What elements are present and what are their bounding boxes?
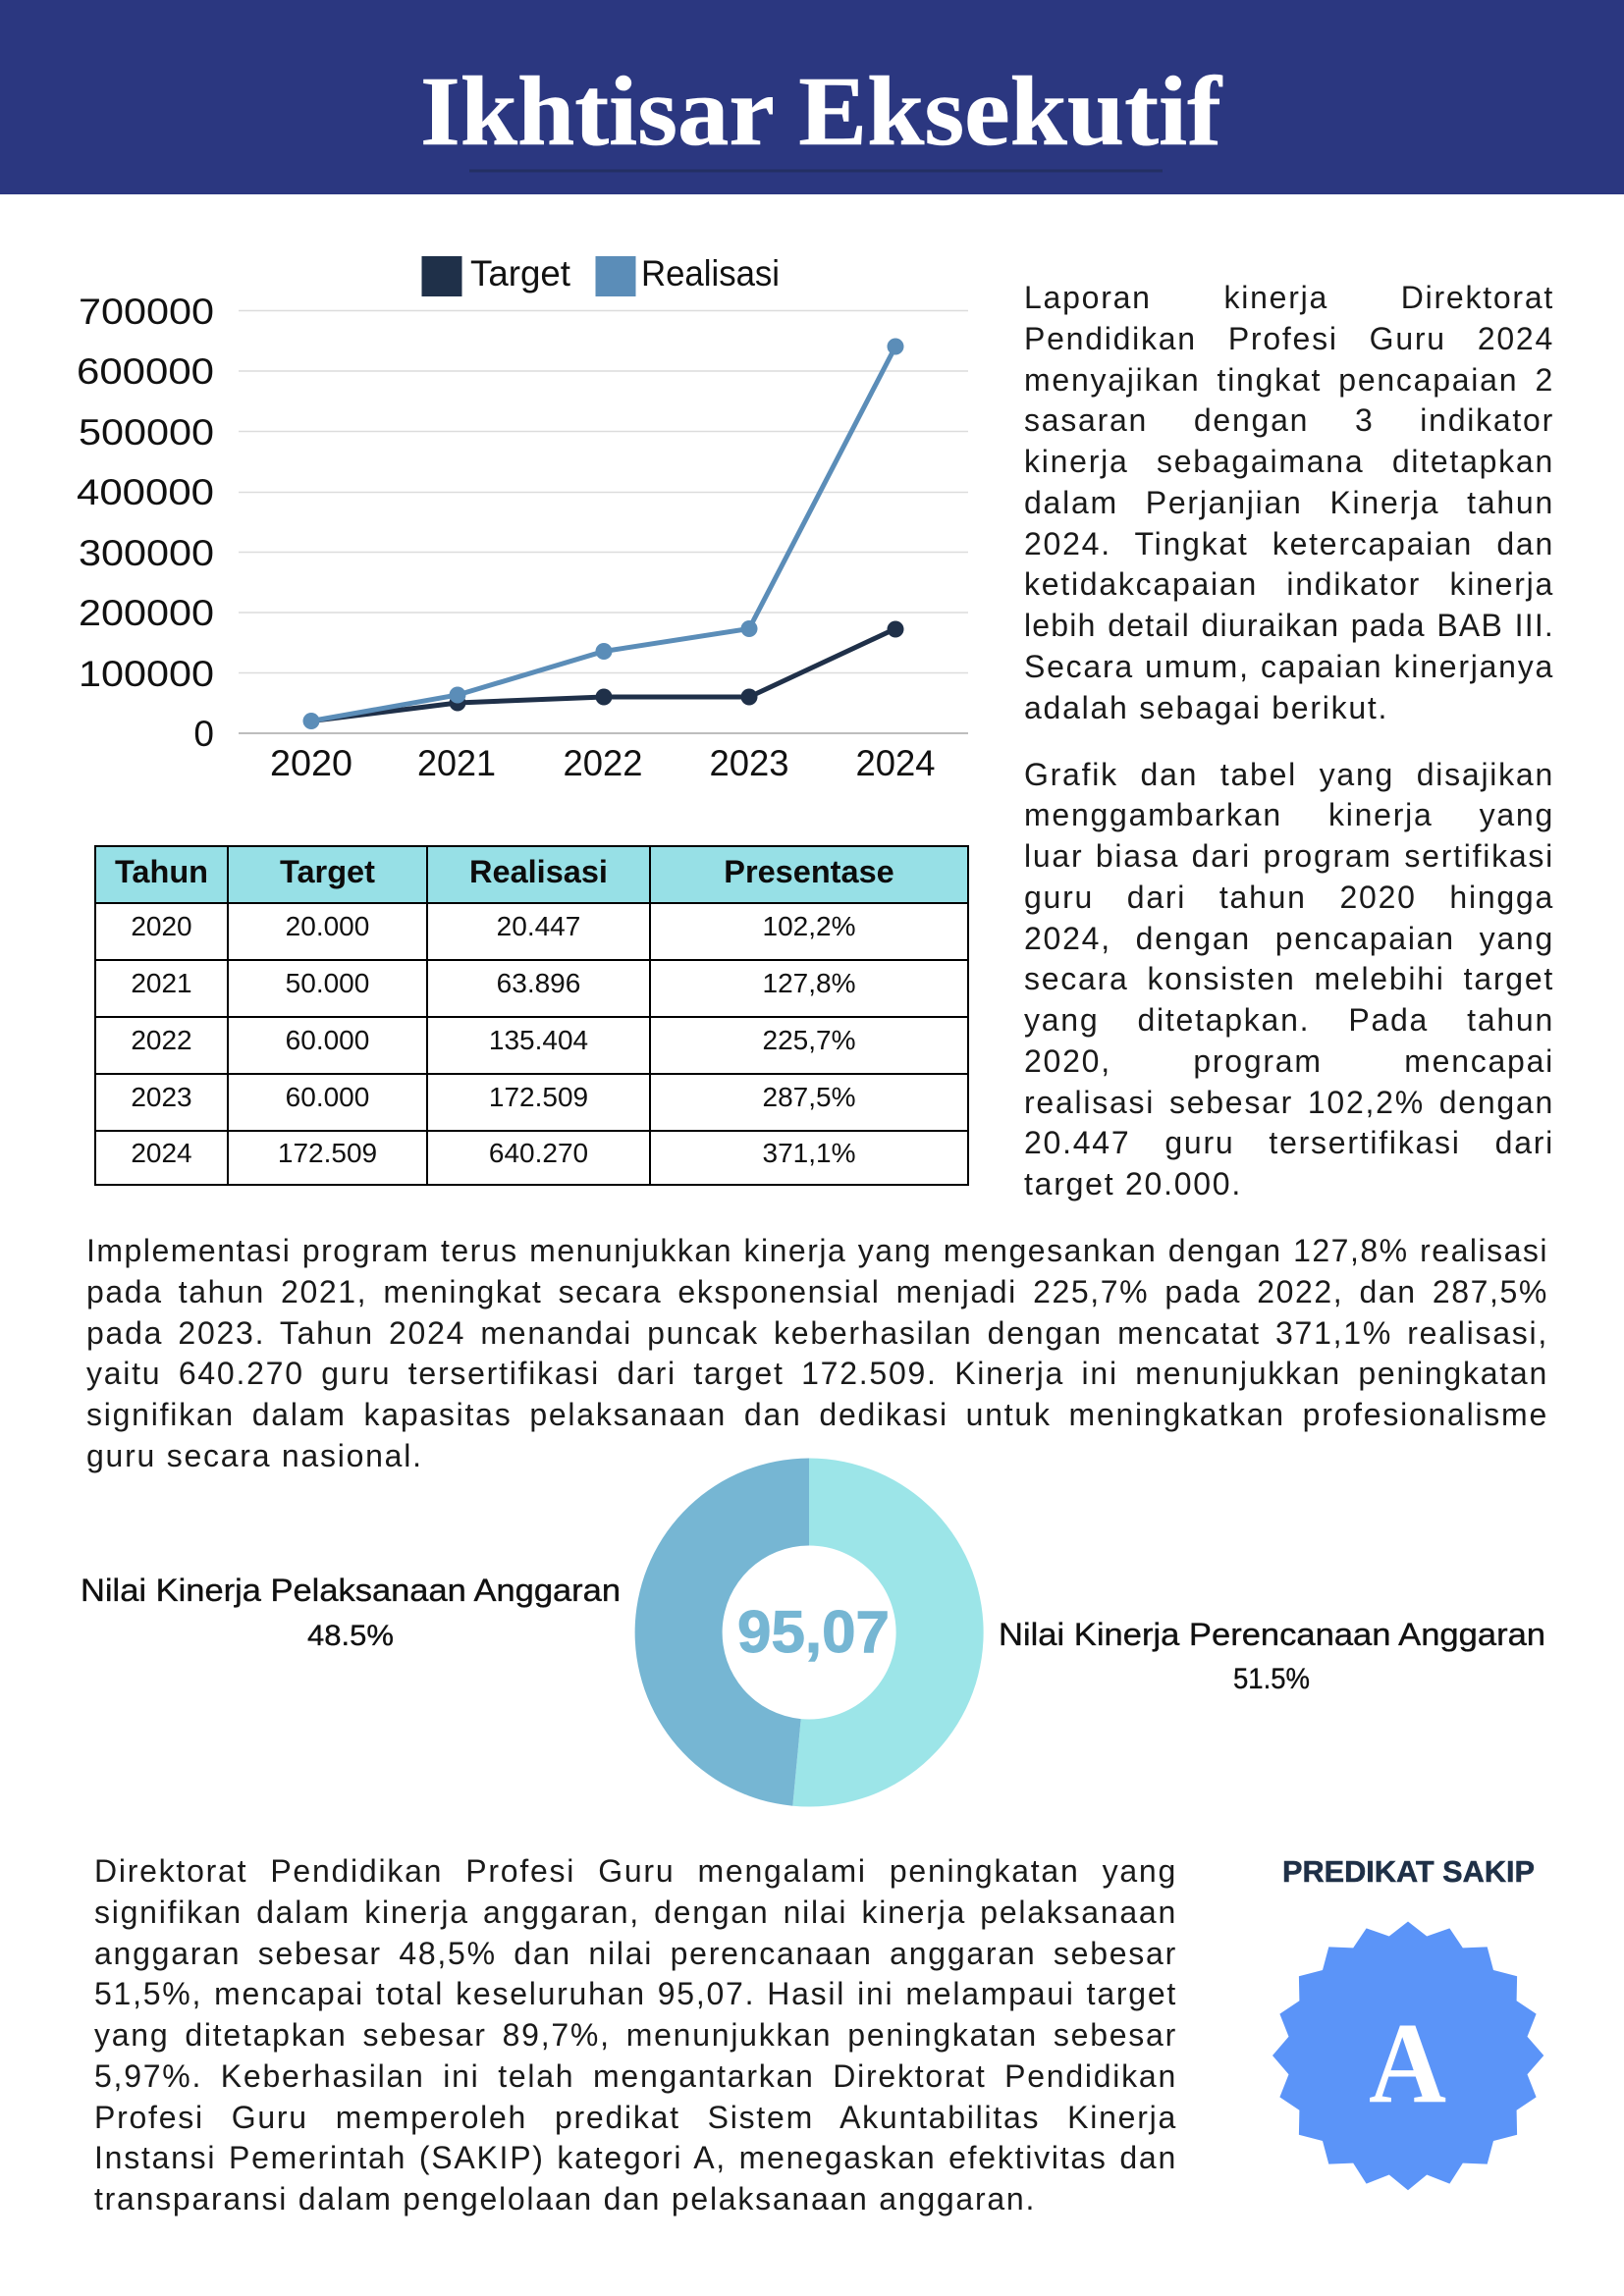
y-axis labels: 600000 <box>77 351 214 392</box>
y-axis labels: 300000 <box>79 533 214 573</box>
paragraph: implementasi program: guru secara nasional. <box>86 1438 423 1473</box>
header banner <box>0 0 1624 194</box>
data table: 60.000 <box>286 1025 369 1055</box>
y-axis labels <box>77 292 214 754</box>
series: Target <box>311 620 903 721</box>
data table: 102,2% <box>763 911 855 941</box>
paragraph: grafik dan tabel: menggambarkan kinerja yang <box>1024 797 1554 832</box>
label: perencanaan anggaran: 51.5% <box>1233 1663 1310 1695</box>
data table: 2021 <box>131 968 192 998</box>
paragraph: laporan kinerja: lebih detail diuraikan pada BAB III. <box>1024 608 1554 643</box>
y-axis labels: 0 <box>193 714 214 754</box>
paragraph: kinerja anggaran <box>94 1853 1177 2216</box>
donut centre value: 95,07 <box>737 1599 890 1665</box>
paragraph: kinerja anggaran: Instansi Pemerintah (SAKIP) kategori A, menegaskan efektivitas dan <box>94 2140 1177 2175</box>
label: pelaksanaan anggaran <box>81 1573 621 1652</box>
paragraph: grafik dan tabel: realisasi sebesar 102,2% dengan <box>1024 1084 1554 1119</box>
paragraph: implementasi program: yaitu 640.270 guru tersertifikasi dari target 172.509. Kinerja ini menunjukkan peningkatan <box>86 1356 1548 1391</box>
data table: Target <box>280 854 375 889</box>
paragraph: laporan kinerja: 2024. Tingkat ketercapaian dan <box>1024 526 1554 561</box>
segment: perencanaan 51.5% <box>792 1458 984 1806</box>
paragraph: implementasi program: Implementasi program terus menunjukkan kinerja yang mengesankan dengan 127,8% realisasi <box>86 1233 1548 1268</box>
paragraph: laporan kinerja: dalam Perjanjian Kinerja tahun <box>1024 485 1554 520</box>
badge grade letter: A <box>1369 1999 1446 2127</box>
x-axis labels: 2024 <box>856 743 935 783</box>
paragraph: kinerja anggaran: 51,5%, mencapai total keseluruhan 95,07. Hasil ini melampaui target <box>94 1976 1177 2011</box>
data table: 287,5% <box>763 1082 855 1112</box>
y-axis labels: 400000 <box>77 472 214 512</box>
paragraph: grafik dan tabel: 2024, dengan pencapaian yang <box>1024 921 1554 956</box>
data table: 172.509 <box>278 1137 377 1168</box>
x-axis labels <box>270 743 935 783</box>
paragraph: grafik dan tabel: luar biasa dari program sertifikasi <box>1024 838 1554 874</box>
data table: 63.896 <box>497 968 580 998</box>
data table: 225,7% <box>763 1025 855 1055</box>
line chart: Target vs Realisasi <box>77 253 968 783</box>
data table: Presentase <box>724 854 894 889</box>
paragraph: laporan kinerja: menyajikan tingkat pencapaian 2 <box>1024 361 1554 397</box>
paragraph: grafik dan tabel: target 20.000. <box>1024 1166 1242 1201</box>
paragraph: implementasi program: pada 2023. Tahun 2024 menandai puncak keberhasilan dengan mencatat 371,1% realisasi, <box>86 1315 1548 1351</box>
data table: Realisasi <box>469 854 608 889</box>
data table: 20.447 <box>497 911 580 941</box>
paragraph: grafik dan tabel: 2020, program mencapai <box>1024 1043 1554 1079</box>
data table: 2022 <box>131 1025 192 1055</box>
data table: 20.000 <box>286 911 369 941</box>
paragraph: grafik dan tabel: guru dari tahun 2020 hingga <box>1024 880 1554 915</box>
paragraph: laporan kinerja <box>1024 280 1554 724</box>
data table: 2020 <box>131 911 192 941</box>
paragraph: laporan kinerja: Secara umum, capaian kinerjanya <box>1024 649 1554 684</box>
x-axis labels: 2020 <box>270 743 352 783</box>
data table: 172.509 <box>489 1082 588 1112</box>
paragraph: implementasi program: pada tahun 2021, meningkat secara eksponensial menjadi 225,7% pada 2022, dan 287,5% <box>86 1274 1548 1309</box>
paragraph: laporan kinerja: adalah sebagai berikut. <box>1024 689 1388 724</box>
paragraph: kinerja anggaran: signifikan dalam kinerja anggaran, dengan nilai kinerja pelaksanaan <box>94 1895 1177 1930</box>
paragraph: laporan kinerja: ketidakcapaian indikator kinerja <box>1024 566 1554 602</box>
y-axis labels: 200000 <box>79 593 214 633</box>
data table: 371,1% <box>763 1137 855 1168</box>
paragraph: laporan kinerja: sasaran dengan 3 indikator <box>1024 402 1554 438</box>
data table: 640.270 <box>489 1137 588 1168</box>
paragraph: implementasi program <box>86 1233 1548 1473</box>
paragraph: kinerja anggaran: Profesi Guru memperoleh predikat Sistem Akuntabilitas Kinerja <box>94 2099 1177 2134</box>
paragraph: grafik dan tabel: 20.447 guru tersertifikasi dari <box>1024 1125 1554 1160</box>
paragraph: kinerja anggaran: anggaran sebesar 48,5% dan nilai perencanaan anggaran sebesar <box>94 1936 1177 1971</box>
data table: 2024 <box>131 1137 192 1168</box>
label: pelaksanaan anggaran: Nilai Kinerja Pelaksanaan Anggaran <box>81 1573 621 1608</box>
paragraph: laporan kinerja: Pendidikan Profesi Guru 2024 <box>1024 321 1554 356</box>
paragraph: grafik dan tabel: secara konsisten melebihi target <box>1024 961 1554 996</box>
data table: 127,8% <box>763 968 855 998</box>
paragraph: implementasi program: signifikan dalam kapasitas pelaksanaan dan dedikasi untuk meningkatkan profesionalisme <box>86 1397 1548 1432</box>
data table <box>94 845 969 1186</box>
badge heading: PREDIKAT SAKIP <box>1282 1854 1535 1889</box>
paragraph: grafik dan tabel: yang ditetapkan. Pada tahun <box>1024 1002 1554 1038</box>
data table: 60.000 <box>286 1082 369 1112</box>
chart legend: Target <box>470 253 571 294</box>
data table: 50.000 <box>286 968 369 998</box>
data table: Tahun <box>115 854 208 889</box>
chart legend <box>422 253 780 296</box>
icon: starburst seal <box>1272 1922 1543 2190</box>
paragraph: kinerja anggaran: 5,97%. Keberhasilan ini telah mengantarkan Direktorat Pendidikan <box>94 2058 1177 2094</box>
x-axis labels: 2022 <box>564 743 642 783</box>
label: pelaksanaan anggaran: 48.5% <box>307 1620 394 1652</box>
segment: pelaksanaan 48.5% <box>635 1459 809 1806</box>
y-axis labels: 700000 <box>79 292 214 332</box>
paragraph: grafik dan tabel <box>1024 756 1554 1201</box>
title: Ikhtisar Eksekutif <box>420 56 1222 166</box>
label: perencanaan anggaran <box>999 1617 1545 1695</box>
paragraph: kinerja anggaran: transparansi dalam pengelolaan dan pelaksanaan anggaran. <box>94 2181 1036 2216</box>
label: perencanaan anggaran: Nilai Kinerja Perencanaan Anggaran <box>999 1617 1545 1652</box>
data table: 135.404 <box>489 1025 588 1055</box>
x-axis labels: 2023 <box>709 743 789 783</box>
paragraph: kinerja anggaran: yang ditetapkan sebesar 89,7%, menunjukkan peningkatan sebesar <box>94 2017 1177 2053</box>
series: Realisasi <box>302 338 903 729</box>
y-axis labels: 100000 <box>79 654 214 694</box>
data table: 2023 <box>131 1082 192 1112</box>
paragraph: laporan kinerja: kinerja sebagaimana ditetapkan <box>1024 444 1554 479</box>
chart legend: Realisasi <box>641 253 780 294</box>
x-axis labels: 2021 <box>417 743 496 783</box>
paragraph: laporan kinerja: Laporan kinerja Direktorat <box>1024 280 1554 315</box>
y-axis labels: 500000 <box>79 412 214 453</box>
paragraph: grafik dan tabel: Grafik dan tabel yang disajikan <box>1024 756 1554 791</box>
paragraph: kinerja anggaran: Direktorat Pendidikan Profesi Guru mengalami peningkatan yang <box>94 1853 1177 1889</box>
